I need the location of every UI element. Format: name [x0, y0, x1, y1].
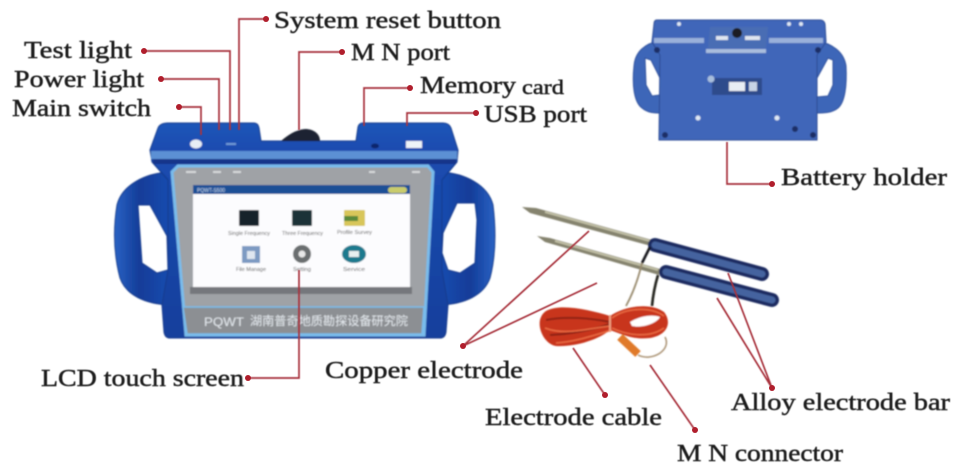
- top highlight band: [151, 151, 457, 159]
- leader: system reset: [239, 19, 266, 130]
- battery indicator: [388, 187, 407, 193]
- title text: PQWT-S500: [197, 188, 225, 194]
- app icons: [239, 210, 366, 263]
- label: electrode cable: Electrode cable: [485, 405, 662, 431]
- leader: LCD: [248, 270, 299, 378]
- label: card: card: [522, 77, 564, 99]
- label: MN port: M N port: [351, 40, 450, 66]
- screen title bar: [193, 185, 410, 194]
- rear strips: [654, 38, 704, 43]
- dark band below highlight: [153, 159, 456, 164]
- leader: MN connector: [650, 365, 695, 430]
- leader: memory card: [364, 88, 410, 126]
- main switch button: [190, 140, 202, 148]
- label: battery holder: Battery holder: [781, 165, 947, 191]
- left handle: [115, 172, 170, 305]
- app icon captions: Service: [343, 267, 365, 273]
- MN port hole: [371, 144, 379, 148]
- brand strip text: PQWT: [204, 315, 245, 329]
- leader: power light: [161, 79, 219, 130]
- right handle: [440, 172, 495, 305]
- USB port slot: [406, 141, 422, 148]
- label: LCD touch screen: LCD touch screen: [41, 366, 244, 392]
- bezel lower strip: [183, 307, 424, 334]
- leader: battery: [727, 142, 772, 184]
- label: main switch: Main switch: [12, 96, 151, 122]
- leader: main switch: [179, 107, 201, 135]
- leader: copper electrode: [463, 231, 597, 346]
- label: memory: Memory: [420, 73, 516, 99]
- bezel: [172, 166, 433, 335]
- electrodes and cable: [522, 207, 772, 357]
- label: system reset button: System reset button: [274, 8, 501, 34]
- leader: electrode cable: [573, 348, 605, 395]
- label: MN connector: M N connector: [677, 441, 843, 467]
- copper electrode rods: [522, 207, 652, 246]
- brand strip text: [204, 313, 408, 329]
- red cable coil: [540, 306, 668, 346]
- brand strip text: 湖南普奇地质勘探设备研究院: [250, 313, 408, 328]
- leader: alloy bar: [717, 273, 772, 388]
- label: alloy electrode bar: Alloy electrode bar: [731, 390, 950, 416]
- leader: MN port: [299, 52, 342, 130]
- rear label: [712, 78, 762, 95]
- leader: test light: [144, 51, 230, 130]
- label: power light: Power light: [14, 67, 144, 93]
- rear view device: [633, 20, 846, 140]
- screen: [193, 185, 410, 287]
- app icon captions: [228, 230, 373, 273]
- app icon captions: Setting: [293, 267, 311, 273]
- app icon captions: Profile Survey: [337, 230, 373, 236]
- screen shadow: [190, 287, 412, 294]
- leader dots: [141, 16, 775, 433]
- leader: USB: [407, 113, 476, 126]
- label: test light: Test light: [24, 38, 132, 64]
- label: copper electrode: Copper electrode: [325, 358, 523, 384]
- MN port connector: [281, 129, 320, 141]
- thin lead wires: [626, 263, 642, 306]
- leader lines: [144, 19, 772, 430]
- app icon captions: File Manage: [236, 267, 266, 273]
- orange connector: [620, 337, 638, 354]
- label: USB port: USB port: [484, 102, 587, 128]
- bezel button marks: [186, 171, 420, 173]
- alloy electrode bars: [655, 245, 762, 274]
- main device: [115, 123, 495, 338]
- app icon captions: Three Frequency: [282, 231, 324, 237]
- device body: [150, 123, 458, 338]
- rear dark corners: [654, 47, 821, 138]
- lights: [226, 143, 236, 145]
- rear screws: [677, 22, 803, 120]
- rear body: [652, 20, 826, 140]
- app icon captions: Single Frequency: [228, 231, 271, 237]
- rear handles: [633, 41, 662, 113]
- rear top connector recess: [708, 27, 768, 48]
